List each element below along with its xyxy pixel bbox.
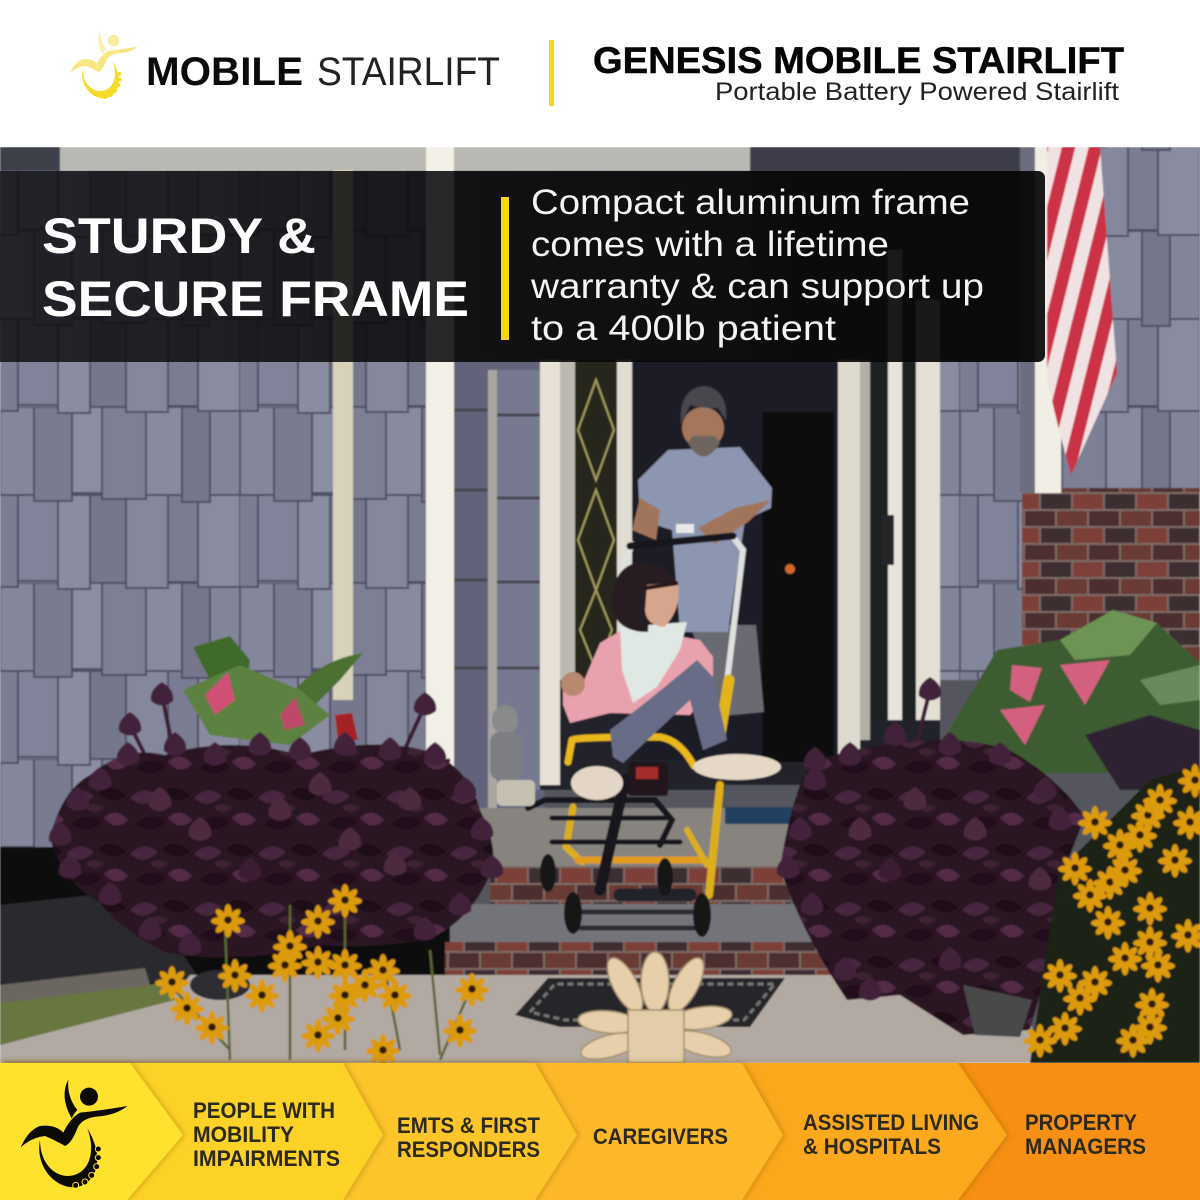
dark caption panel bbox=[0, 171, 1045, 362]
house wall right bbox=[940, 147, 1200, 680]
left shrub green foliage bbox=[183, 636, 363, 745]
label: caregivers: CAREGIVERS bbox=[593, 1124, 728, 1149]
left shrub sprigs bbox=[130, 695, 450, 770]
label: people with mobility impairments: IMPAIRMENTS bbox=[193, 1146, 340, 1171]
front steps bbox=[0, 785, 840, 997]
walkway and lawn bbox=[0, 968, 1040, 1063]
panel yellow divider bbox=[501, 197, 509, 340]
stairlift frame bbox=[528, 524, 743, 928]
footer logo mark bbox=[21, 1079, 127, 1188]
man pushing stairlift bbox=[632, 386, 772, 716]
header logo mark bbox=[70, 30, 138, 99]
left shrub loose leaves bbox=[49, 682, 503, 956]
left yellow flowers bbox=[155, 884, 489, 1068]
photo: porch scene bbox=[0, 147, 1200, 1068]
label: assisted living and hospitals: & HOSPITALS bbox=[803, 1134, 941, 1159]
header brand name light: STAIRLIFT bbox=[317, 50, 500, 94]
label: people with mobility impairments bbox=[193, 1098, 340, 1171]
panel heading: STURDY & bbox=[42, 208, 316, 264]
right yellow flowers bbox=[1023, 764, 1200, 1058]
panel heading bbox=[42, 208, 469, 327]
wooden flower ornament bbox=[577, 952, 734, 1064]
entry wall bbox=[426, 147, 544, 820]
right shrub green foliage bbox=[885, 610, 1200, 790]
label: EMTs and first responders bbox=[397, 1113, 541, 1162]
header brand name: MOBILE bbox=[146, 50, 303, 94]
panel description: Compact aluminum frame bbox=[531, 183, 970, 222]
label: EMTs and first responders: RESPONDERS bbox=[397, 1137, 540, 1162]
left shrub bbox=[49, 636, 503, 1000]
panel heading: SECURE FRAME bbox=[42, 271, 469, 327]
right shrub sprig bbox=[915, 690, 930, 750]
panel description: to a 400lb patient bbox=[531, 309, 836, 348]
photo base bbox=[0, 147, 1200, 1063]
label: assisted living and hospitals: ASSISTED LIVING bbox=[803, 1110, 979, 1135]
label: assisted living and hospitals bbox=[803, 1110, 979, 1159]
product title: GENESIS MOBILE STAIRLIFT bbox=[593, 39, 1124, 81]
seated woman bbox=[561, 562, 781, 800]
dark planter bbox=[190, 970, 250, 1000]
right planter bbox=[963, 985, 1032, 1037]
footer chevron band bbox=[0, 1063, 1200, 1200]
american flag bbox=[1047, 147, 1117, 475]
label: property managers: MANAGERS bbox=[1025, 1134, 1146, 1159]
label: property managers: PROPERTY bbox=[1025, 1110, 1137, 1135]
label: people with mobility impairments: PEOPLE WITH bbox=[193, 1098, 335, 1123]
header yellow divider bbox=[549, 40, 554, 106]
panel description bbox=[530, 183, 984, 348]
product subtitle: Portable Battery Powered Stairlift bbox=[715, 78, 1119, 106]
audience labels bbox=[193, 1098, 1146, 1171]
right shrub bbox=[777, 610, 1200, 1063]
right shrub loose leaves bbox=[777, 677, 1071, 1000]
statue and planter bbox=[490, 705, 535, 806]
label: people with mobility impairments: MOBILITY bbox=[193, 1122, 294, 1147]
doorway bbox=[540, 250, 940, 790]
stairlift wheels bbox=[540, 762, 711, 937]
header background bbox=[0, 0, 1200, 147]
label: EMTs and first responders: EMTS & FIRST bbox=[397, 1113, 541, 1138]
panel description: warranty & can support up bbox=[530, 267, 984, 306]
label: property managers bbox=[1025, 1110, 1146, 1159]
panel description: comes with a lifetime bbox=[531, 225, 889, 264]
house wall left bbox=[0, 147, 1040, 847]
